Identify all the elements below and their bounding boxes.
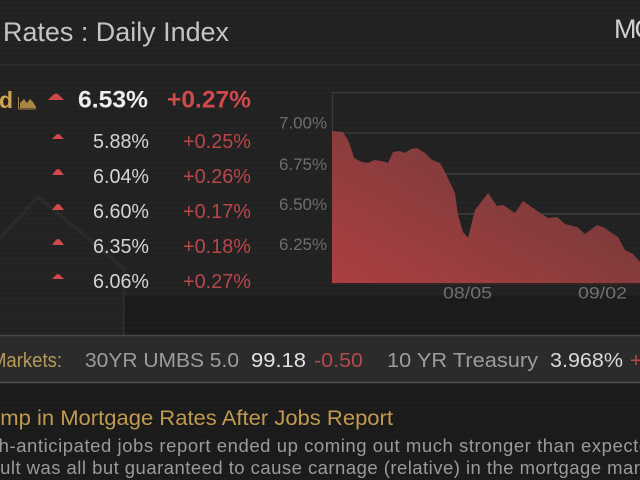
markets bar <box>0 335 640 383</box>
area series: rate history <box>332 131 640 283</box>
Treasury quote <box>387 349 640 372</box>
row 2: +0.25% <box>183 130 251 153</box>
baseline <box>332 283 640 285</box>
row 5: 6.35% <box>93 235 149 258</box>
icon: mini chart <box>18 97 36 109</box>
x axis labels: 09/02 <box>578 284 627 302</box>
Treasury quote: 10 YR Treasury <box>387 349 539 372</box>
row 4 <box>52 200 251 223</box>
row 4: +0.17% <box>183 200 251 223</box>
UMBS quote: 30YR UMBS 5.0 <box>85 349 239 372</box>
row 3: +0.26% <box>183 165 251 188</box>
row 3 <box>52 165 251 188</box>
UMBS quote <box>85 349 363 372</box>
row 6: +0.27% <box>183 270 251 293</box>
row 6: 6.06% <box>93 270 149 293</box>
y axis labels: 7.00% <box>279 114 327 132</box>
row 2 <box>52 130 251 153</box>
y axis labels: 6.75% <box>279 156 327 174</box>
row 5 <box>52 235 251 258</box>
y axis labels <box>279 114 327 254</box>
row 5: +0.18% <box>183 235 251 258</box>
UMBS quote: -0.50 <box>314 349 363 372</box>
news body <box>0 435 640 478</box>
rates table <box>0 86 251 293</box>
UMBS quote: 99.18 <box>251 349 306 372</box>
plot frame <box>332 92 640 283</box>
row 6 <box>52 270 251 293</box>
row 1: +0.27% <box>167 86 251 114</box>
row 3: 6.04% <box>93 165 149 188</box>
Treasury quote: 3.968% <box>550 349 623 372</box>
y axis labels: 6.50% <box>279 196 327 214</box>
area chart <box>279 92 640 302</box>
row 1 <box>48 86 251 114</box>
title: Rates : Daily Index <box>3 17 229 47</box>
row 2: 5.88% <box>93 130 149 153</box>
x axis labels: 08/05 <box>443 284 492 302</box>
row 1: 6.53% <box>78 86 148 114</box>
x axis labels <box>443 284 627 302</box>
row 4: 6.60% <box>93 200 149 223</box>
y axis labels: 6.25% <box>279 236 327 254</box>
